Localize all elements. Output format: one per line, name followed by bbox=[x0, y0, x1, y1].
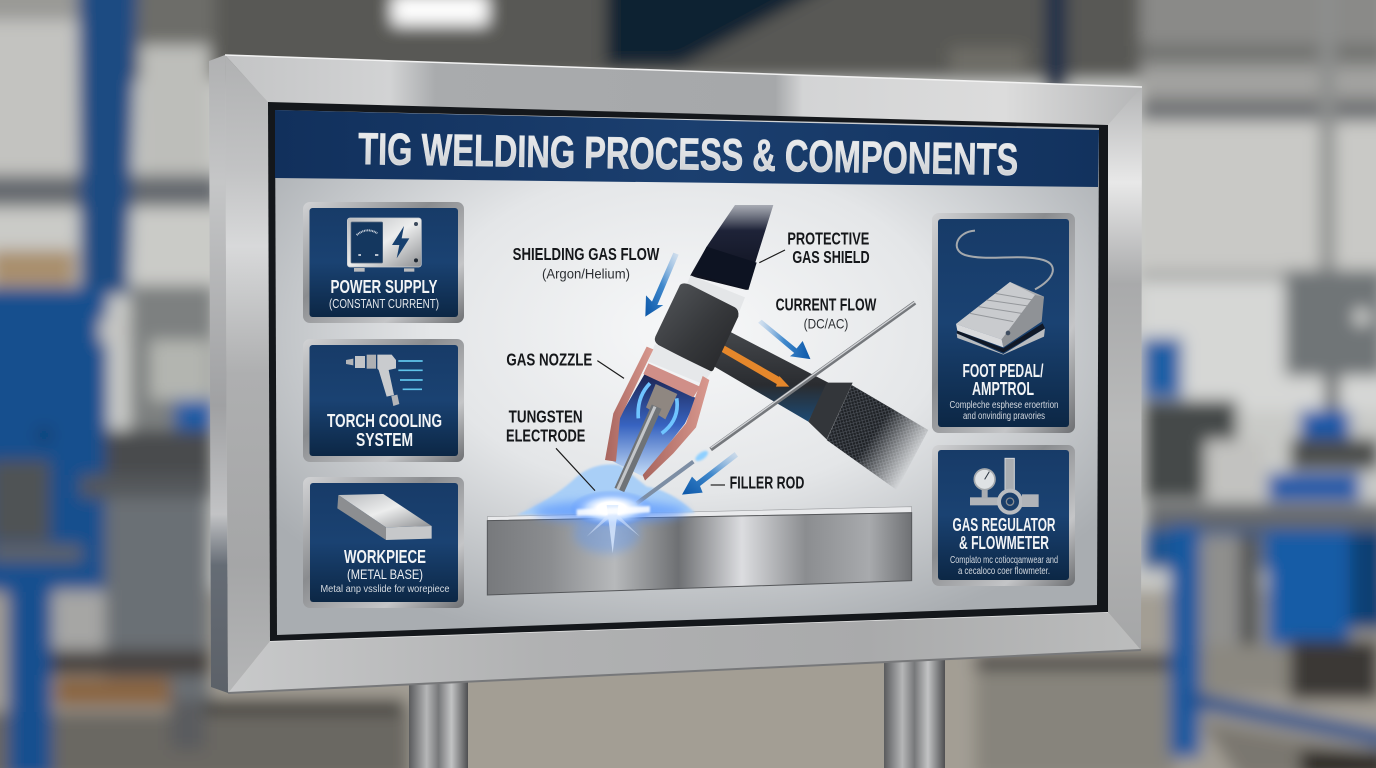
label: foot pedal / amptrol: FOOT PEDAL/ bbox=[962, 361, 1044, 381]
workpiece plate bbox=[487, 507, 912, 595]
caption: gas regulator: Complato mc cotiocqamwear and bbox=[950, 555, 1058, 566]
tungsten electrode bbox=[618, 407, 657, 490]
sign frame bbox=[209, 55, 1142, 693]
weld flash bbox=[570, 490, 653, 553]
arrow: shielding gas flow bbox=[645, 253, 679, 317]
label: workpiece: WORKPIECE bbox=[344, 547, 426, 567]
icon: cooling torch bbox=[346, 355, 423, 406]
welding diagram bbox=[487, 205, 928, 595]
card: gas regulator: & FLOWMETER bbox=[959, 533, 1049, 553]
card: foot pedal: and onvinding pravories bbox=[963, 411, 1045, 422]
icon: power supply bbox=[347, 218, 421, 272]
label: torch cooling system: TORCH COOLING bbox=[327, 411, 442, 431]
torch head bbox=[655, 283, 739, 371]
sign panel bbox=[275, 110, 1099, 635]
card: foot pedal bbox=[932, 213, 1075, 433]
label: gas nozzle: GAS NOZZLE bbox=[506, 349, 592, 369]
card: foot pedal: AMPTROL bbox=[972, 379, 1034, 399]
stand posts bbox=[409, 655, 945, 768]
label: current flow: (DC/AC) bbox=[804, 315, 848, 331]
label: tungsten electrode: TUNGSTEN bbox=[509, 407, 583, 427]
card: torch cooling system bbox=[303, 339, 464, 462]
sublabel: constant current: (CONSTANT CURRENT) bbox=[329, 297, 439, 311]
icon: metal plate bbox=[337, 494, 432, 540]
label: shielding gas flow bbox=[513, 244, 660, 282]
card: gas regulator bbox=[932, 445, 1075, 586]
caption: workpiece: Metal anp vsslide for worepiece bbox=[320, 584, 450, 595]
label: shielding gas flow: SHIELDING GAS FLOW bbox=[513, 244, 660, 264]
gas nozzle bbox=[605, 347, 709, 481]
current direction arrow on handle bbox=[717, 343, 789, 387]
label: shielding gas flow: (Argon/Helium) bbox=[542, 266, 630, 282]
title band bbox=[275, 110, 1099, 187]
filler rod bbox=[637, 302, 915, 503]
caption: foot pedal: Compleche esphese eroertrion bbox=[950, 400, 1058, 411]
arrow: filler rod bbox=[682, 452, 738, 495]
sublabel: metal base: (METAL BASE) bbox=[347, 566, 423, 582]
torch hose bbox=[690, 205, 773, 290]
label: current flow bbox=[776, 295, 877, 331]
icon: gas regulator bbox=[970, 458, 1039, 513]
label: filler rod: FILLER ROD bbox=[730, 472, 804, 492]
torch handle bbox=[712, 330, 928, 490]
leader lines bbox=[556, 250, 785, 491]
label: tungsten electrode bbox=[506, 407, 585, 446]
label: gas regulator & flowmeter: GAS REGULATOR bbox=[952, 515, 1056, 535]
nozzle ring bbox=[648, 344, 712, 384]
title: TIG WELDING PROCESS & COMPONENTS bbox=[358, 123, 1019, 185]
label: current flow: CURRENT FLOW bbox=[776, 295, 877, 315]
card: torch cooling system: SYSTEM bbox=[356, 430, 413, 450]
arrow: current flow bbox=[755, 319, 813, 359]
card: power supply bbox=[303, 202, 464, 323]
card: workpiece bbox=[303, 477, 464, 608]
label: protective gas shield: PROTECTIVE bbox=[787, 228, 869, 248]
torch neck ring bbox=[686, 275, 745, 312]
card: gas regulator: a cecaloco coer flowmeter. bbox=[958, 566, 1050, 577]
icon: foot pedal bbox=[956, 231, 1053, 355]
label: protective gas shield bbox=[787, 228, 870, 267]
label: protective gas shield: GAS SHIELD bbox=[792, 247, 870, 267]
gas cloud bbox=[517, 464, 695, 553]
label: tungsten electrode: ELECTRODE bbox=[506, 426, 585, 446]
label: power supply: POWER SUPPLY bbox=[330, 277, 438, 297]
